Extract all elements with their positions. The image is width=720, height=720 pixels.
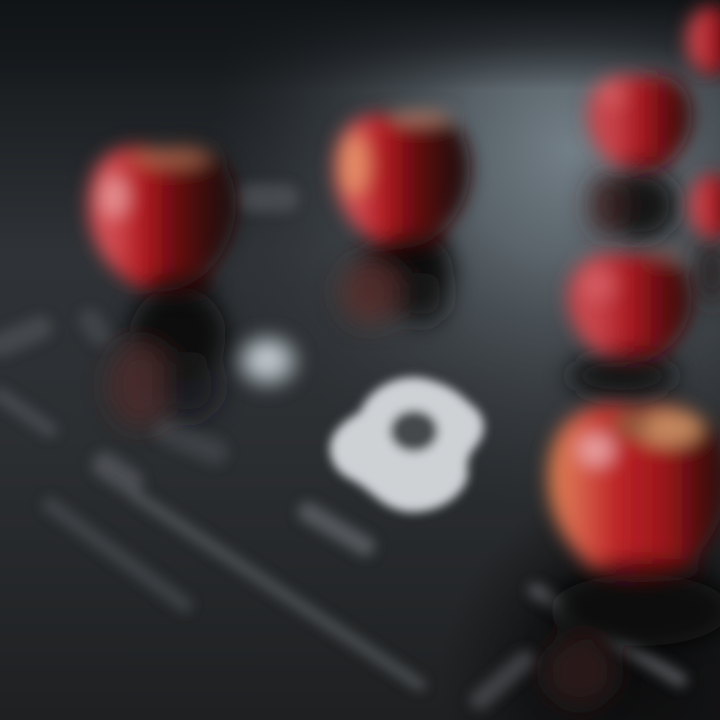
reflection: right edge apple: [698, 238, 720, 306]
apple 1: [88, 146, 236, 297]
faint surface markings: [0, 198, 680, 700]
icon: large white padlock-like badge: [330, 377, 484, 512]
apple 7: right edge: [689, 174, 720, 238]
apple 2: [334, 111, 470, 253]
reflection: apple 5: [544, 574, 720, 706]
reflection: apple 3: [588, 169, 678, 241]
reflection: apple 2: [340, 230, 453, 324]
apple 6: top right corner: [686, 6, 720, 74]
icon: small white blob: [238, 335, 298, 387]
reflection: apple 4: [568, 354, 676, 398]
apple 4: [568, 249, 692, 363]
apple 5: large foreground: [548, 404, 720, 582]
apple 3: [588, 75, 692, 172]
reflection: apple 1: [108, 287, 226, 427]
